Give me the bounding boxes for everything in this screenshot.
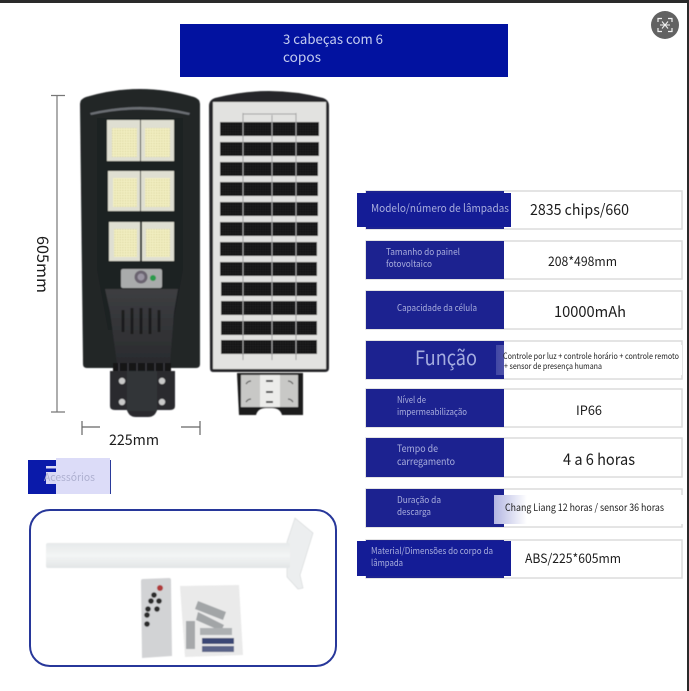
spec row: waterproof level: Nível de	[397, 393, 426, 406]
sensor plate	[121, 269, 162, 288]
mounting bracket	[110, 371, 175, 417]
spec row: battery capacity	[366, 291, 682, 329]
dimension: width 225mm	[82, 421, 200, 450]
remote control	[141, 578, 172, 658]
lamp body	[80, 89, 200, 368]
accessories heading	[28, 458, 111, 494]
spec row: discharge time: Chang Liang 12 horas / sensor 36 horas	[505, 499, 664, 514]
spec row: discharge time: descarga	[397, 505, 431, 518]
dimension: height 605mm: 605mm	[32, 236, 56, 293]
panel housing	[209, 91, 329, 372]
back mounting plate	[237, 373, 303, 415]
title banner: copos	[283, 46, 321, 66]
lamp front view	[80, 89, 200, 417]
spec row: charging time: Tempo de	[397, 440, 438, 455]
spec row: function: + sensor de presença humana	[504, 360, 602, 372]
spec row: lamp model: Modelo/número de lâmpadas	[371, 200, 509, 216]
spec row: charging time: 4 a 6 horas	[563, 446, 635, 470]
dimension: height 605mm	[32, 96, 65, 412]
lamp back view with solar panel	[209, 91, 329, 415]
title banner	[180, 24, 508, 77]
spec row: solar panel size: Tamanho do painel	[386, 245, 460, 258]
title banner: 3 cabeças com 6	[283, 28, 383, 48]
spec row: waterproof level: IP66	[576, 400, 602, 419]
panel: accessories	[30, 510, 336, 666]
spec row: discharge time	[366, 489, 684, 527]
spec row: discharge time: Duração da	[397, 493, 441, 506]
spec row: waterproof level	[366, 389, 682, 427]
spec row: material and body dimensions: ABS/225*605mm	[525, 548, 621, 567]
spec row: function: Função	[415, 342, 477, 371]
icon: close viewer button	[651, 11, 679, 39]
spec row: battery capacity: Capacidade da célula	[397, 301, 477, 314]
dimension: width 225mm: 225mm	[109, 429, 159, 450]
heat sink	[105, 289, 178, 371]
spec row: charging time: carregamento	[397, 453, 455, 468]
spec row: lamp model: 2835 chips/660	[530, 199, 629, 220]
bag of screws and batteries	[180, 585, 243, 657]
spec row: function	[366, 341, 682, 379]
spec row: material and body dimensions	[357, 540, 682, 578]
spec row: solar panel size	[366, 241, 682, 279]
spec row: material and body dimensions: lâmpada	[371, 556, 403, 569]
spec row: solar panel size: fotovoltaico	[386, 257, 432, 270]
accessories heading: Acessórios	[44, 469, 95, 485]
spec row: material and body dimensions: Material/Dimensões do corpo da	[371, 544, 493, 557]
spec row: lamp model	[357, 191, 682, 229]
mounting arm	[46, 518, 313, 589]
solar cells	[220, 122, 319, 354]
spec row: battery capacity: 10000mAh	[554, 301, 626, 322]
spec row: solar panel size: 208*498mm	[548, 251, 617, 270]
LED modules	[107, 120, 174, 261]
spec row: waterproof level: impermeabilização	[397, 405, 467, 418]
spec row: charging time	[366, 438, 682, 477]
